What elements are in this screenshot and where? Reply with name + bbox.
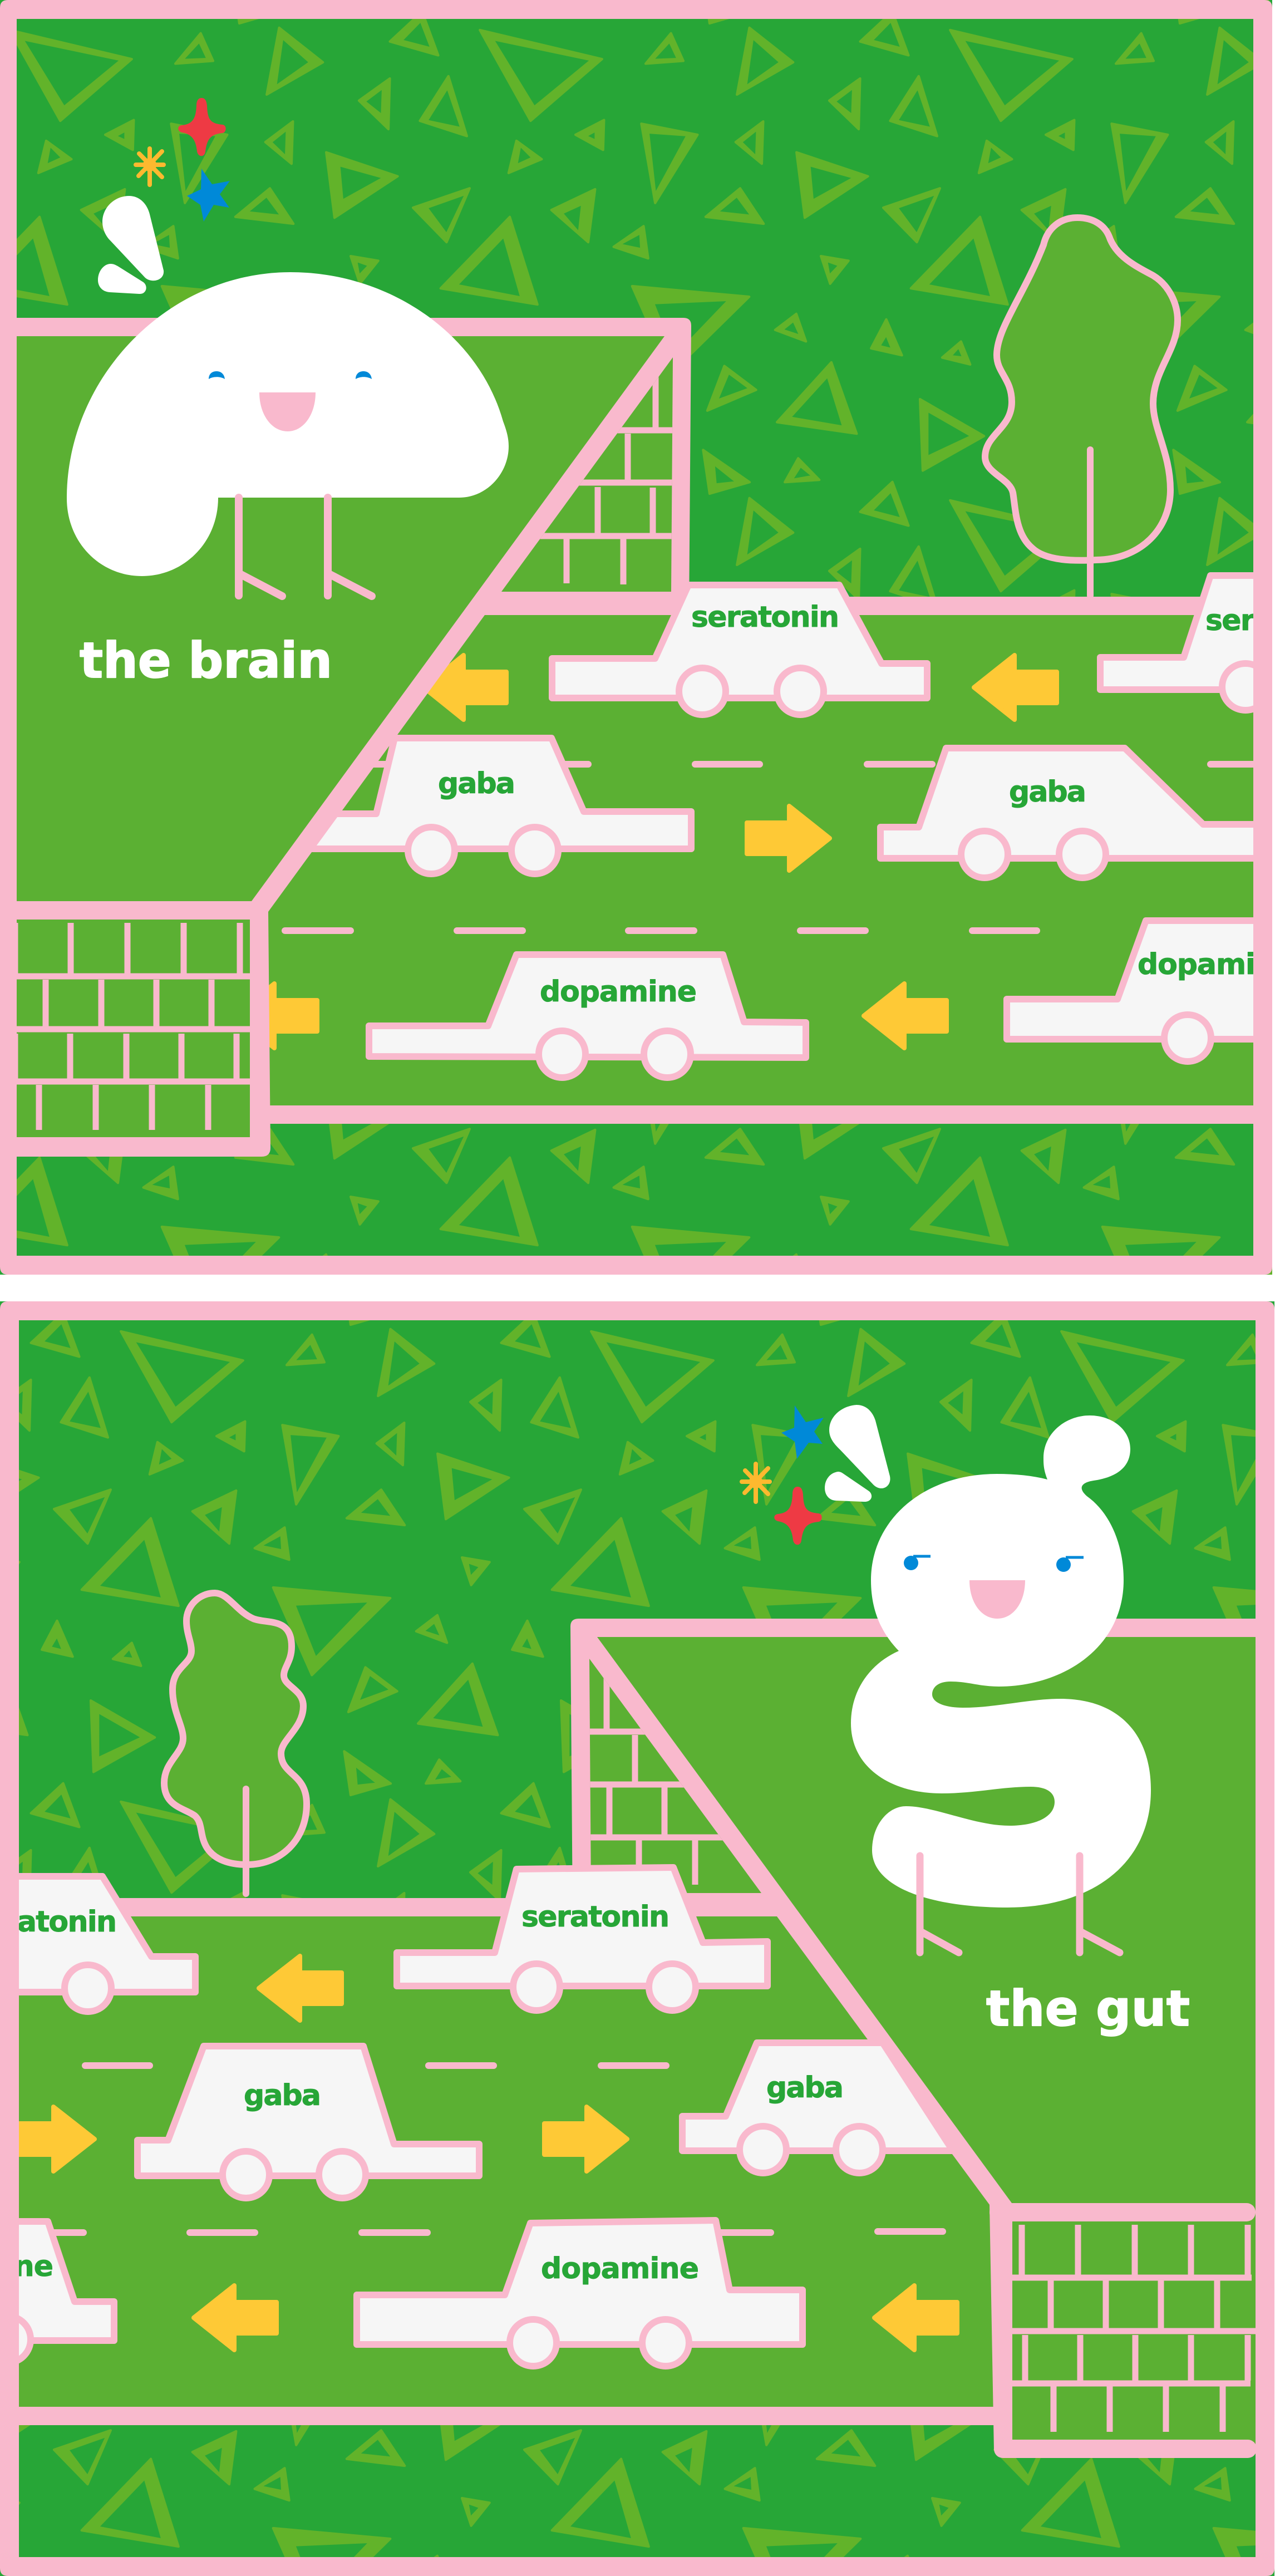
arrow: right — [747, 806, 830, 871]
car: gaba, right — [682, 2043, 953, 2173]
arrow: left — [874, 2285, 957, 2350]
car: dopamine, right — [1007, 921, 1275, 1061]
icon: exclamation — [98, 196, 164, 294]
arrow: left — [259, 1956, 342, 2021]
icon: orange star — [136, 149, 164, 185]
arrow: left — [194, 2285, 277, 2350]
car: gaba: gaba — [244, 2079, 321, 2112]
road — [0, 1898, 996, 2425]
car: dopamine, left — [0, 2221, 114, 2363]
panel background — [0, 1301, 1274, 2576]
car: seratonin — [552, 585, 927, 715]
car: gaba, behind the wall: gaba — [438, 767, 515, 800]
panel frame — [0, 1301, 1274, 2576]
car: gaba, right: gaba — [766, 2071, 844, 2105]
car: dopamine — [369, 955, 806, 1078]
arrow: right — [0, 2107, 95, 2171]
icon: exclamation — [825, 1405, 890, 1502]
character: gut — [851, 1415, 1151, 1953]
car: seratonin, left — [0, 1876, 195, 2012]
icon: orange star — [742, 1464, 770, 1502]
icon: blue star — [781, 1405, 824, 1459]
panel background — [0, 0, 1272, 1275]
heading: the brain: the brain — [80, 632, 332, 689]
car: gaba, right: gaba — [1009, 775, 1086, 809]
car: seratonin: seratonin — [691, 601, 839, 634]
icon: red sparkle — [178, 98, 226, 156]
character: brain — [67, 272, 509, 596]
car: seratonin: seratonin — [521, 1900, 670, 1934]
tree — [164, 1593, 307, 1894]
heading: the gut: the gut — [986, 1980, 1190, 2037]
car: dopamine — [357, 2220, 803, 2366]
arrow: left — [974, 655, 1057, 720]
gut land and brick walls — [570, 1619, 1257, 2458]
arrow: left — [424, 655, 506, 720]
tree — [985, 218, 1178, 596]
car: seratonin, right — [1100, 576, 1275, 710]
icon: blue star — [187, 169, 230, 222]
arrow: left — [864, 984, 947, 1048]
car: gaba, right — [880, 748, 1275, 878]
panel: the brain — [0, 0, 1275, 1275]
icon: red sparkle — [774, 1487, 822, 1545]
brain land and brick walls — [0, 318, 691, 1157]
arrow: left — [269, 981, 319, 1050]
car: seratonin — [397, 1867, 767, 2010]
car: dopamine: dopamine — [540, 975, 697, 1009]
panel frame — [0, 0, 1272, 1275]
panel: the gut — [0, 1301, 1274, 2576]
car: dopamine: dopamine — [541, 2252, 699, 2285]
car: gaba, behind the wall — [312, 735, 695, 877]
car: gaba — [137, 2046, 479, 2198]
arrow: right — [544, 2107, 627, 2171]
road — [268, 597, 1253, 1124]
